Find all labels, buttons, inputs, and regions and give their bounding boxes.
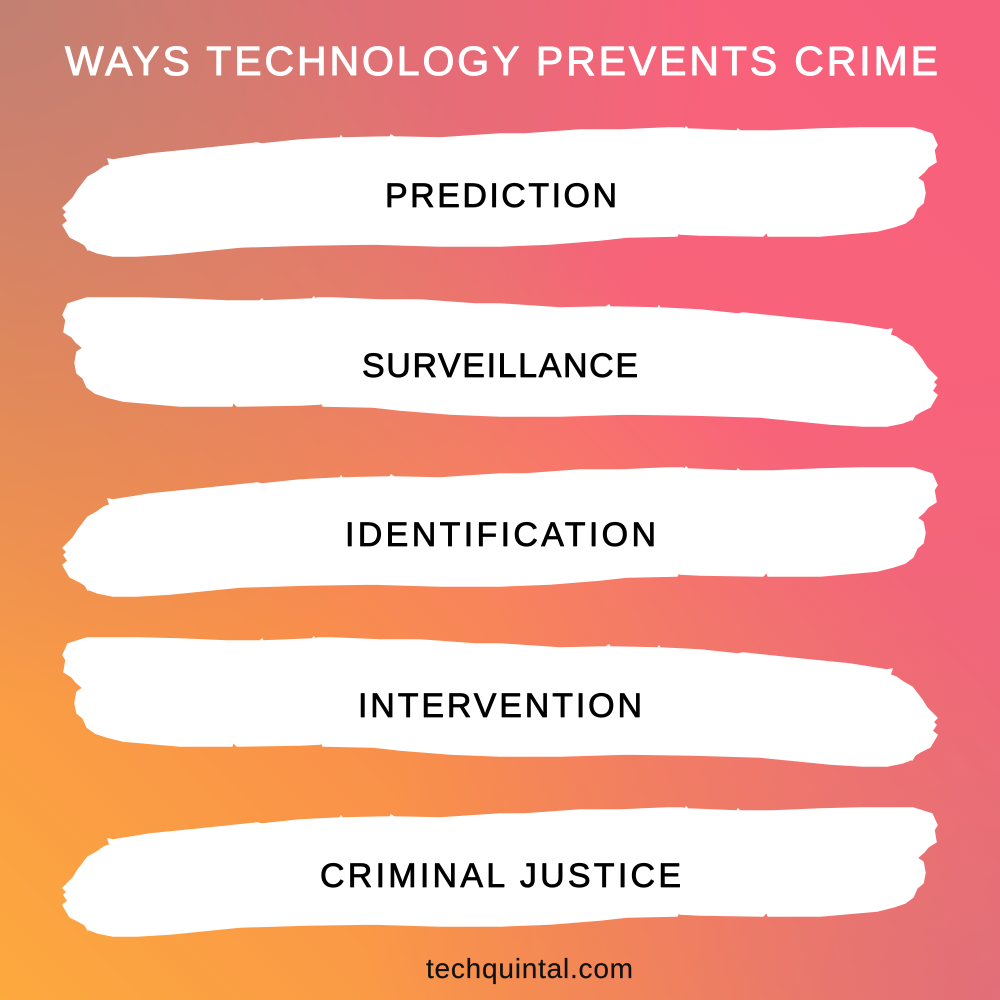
footer: website: techquintal.com [426, 953, 633, 984]
panel: criminal justice [63, 807, 937, 936]
panel: intervention [63, 637, 937, 766]
label: prediction: PREDICTION [385, 177, 617, 215]
panel: surveillance [63, 297, 937, 426]
title: WAYS TECHNOLOGY PREVENTS CRIME [65, 38, 938, 84]
label: surveillance: SURVEILLANCE [362, 347, 638, 385]
panel: prediction [63, 127, 937, 256]
label: criminal justice: CRIMINAL JUSTICE [320, 857, 681, 895]
label: identification: IDENTIFICATION [345, 516, 656, 554]
label: intervention: INTERVENTION [358, 687, 642, 725]
panel: identification [63, 467, 937, 596]
